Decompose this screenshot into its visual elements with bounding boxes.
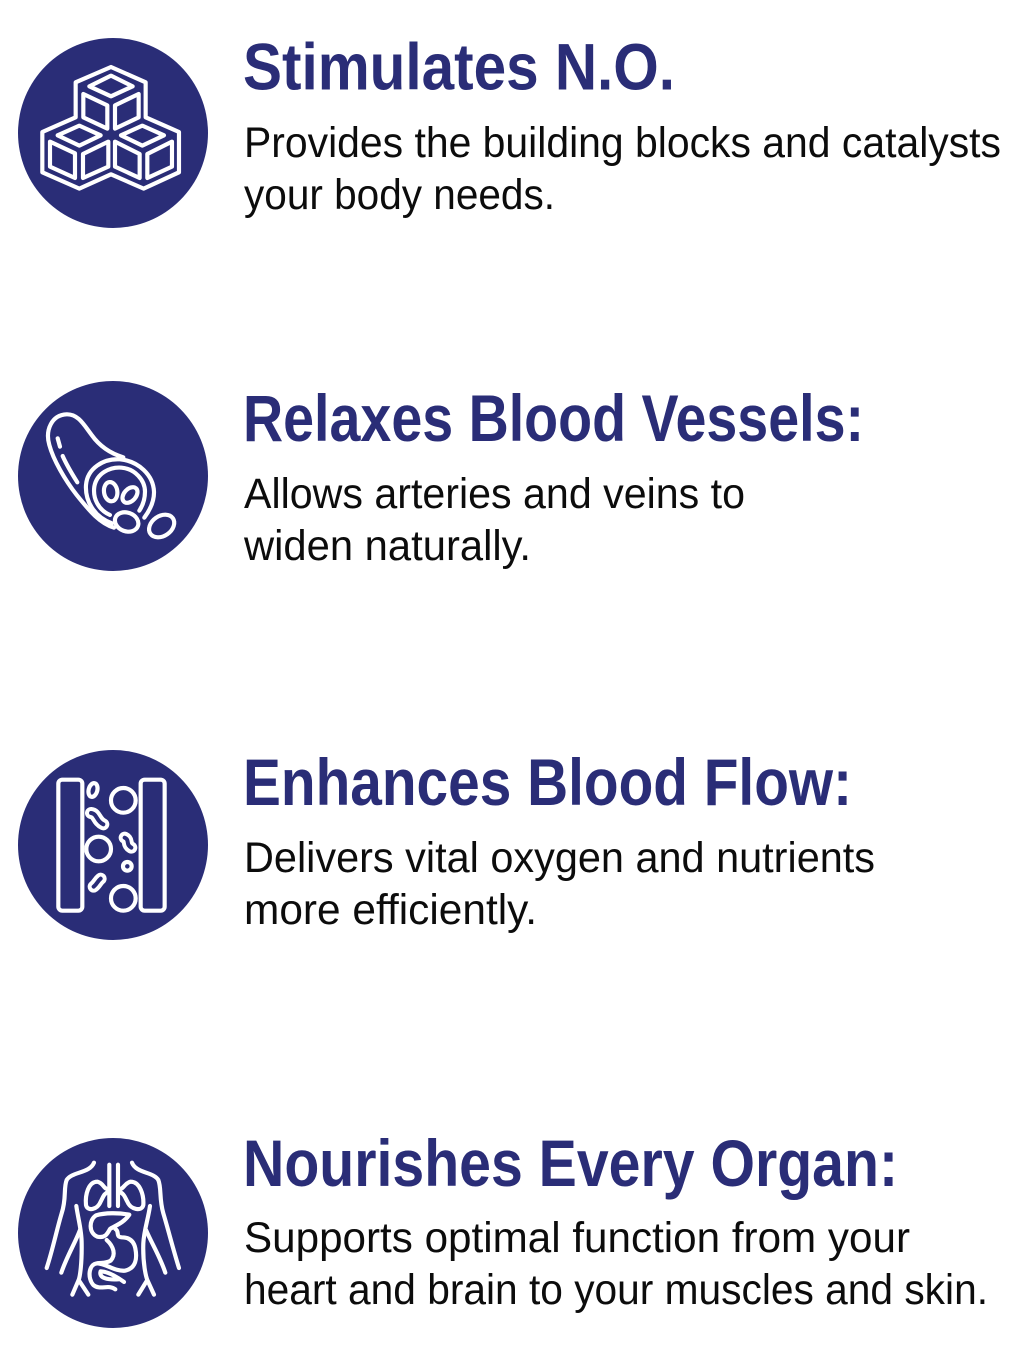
icon: blood vessel (18, 381, 208, 571)
text: Relaxes description: Allows arteries and veins to (244, 470, 745, 518)
text: Enhances description: more efficiently. (244, 886, 537, 934)
text: Enhances description (244, 834, 875, 934)
heading: Stimulates N.O.: Stimulates N.O. (243, 30, 675, 104)
heading: Relaxes Blood Vessels: Relaxes Blood Vessels: (243, 381, 864, 455)
text: Nourishes description: Supports optimal function from your (244, 1214, 910, 1262)
text: Enhances description: Delivers vital oxygen and nutrients (244, 834, 875, 882)
panel: Nourishes Every Organ (18, 1126, 988, 1328)
text: Nourishes description: heart and brain to your muscles and skin. (244, 1266, 988, 1314)
icon: blood flow (18, 750, 208, 940)
heading: Nourishes Every Organ: Nourishes Every Organ: (243, 1126, 898, 1200)
heading: Enhances Blood Flow: Enhances Blood Flow: (243, 745, 852, 819)
panel: Relaxes Blood Vessels (18, 381, 864, 571)
icon: building blocks (18, 38, 208, 228)
panel: Enhances Blood Flow (18, 745, 875, 940)
icon: human organs (18, 1138, 208, 1328)
panel: Stimulates N.O. (18, 30, 1001, 228)
text: Relaxes description: widen naturally. (243, 522, 531, 570)
text: Stimulates description (244, 119, 1001, 219)
text: Relaxes description (243, 470, 745, 570)
text: Stimulates description: your body needs. (244, 171, 555, 219)
text: Nourishes description (244, 1214, 988, 1314)
